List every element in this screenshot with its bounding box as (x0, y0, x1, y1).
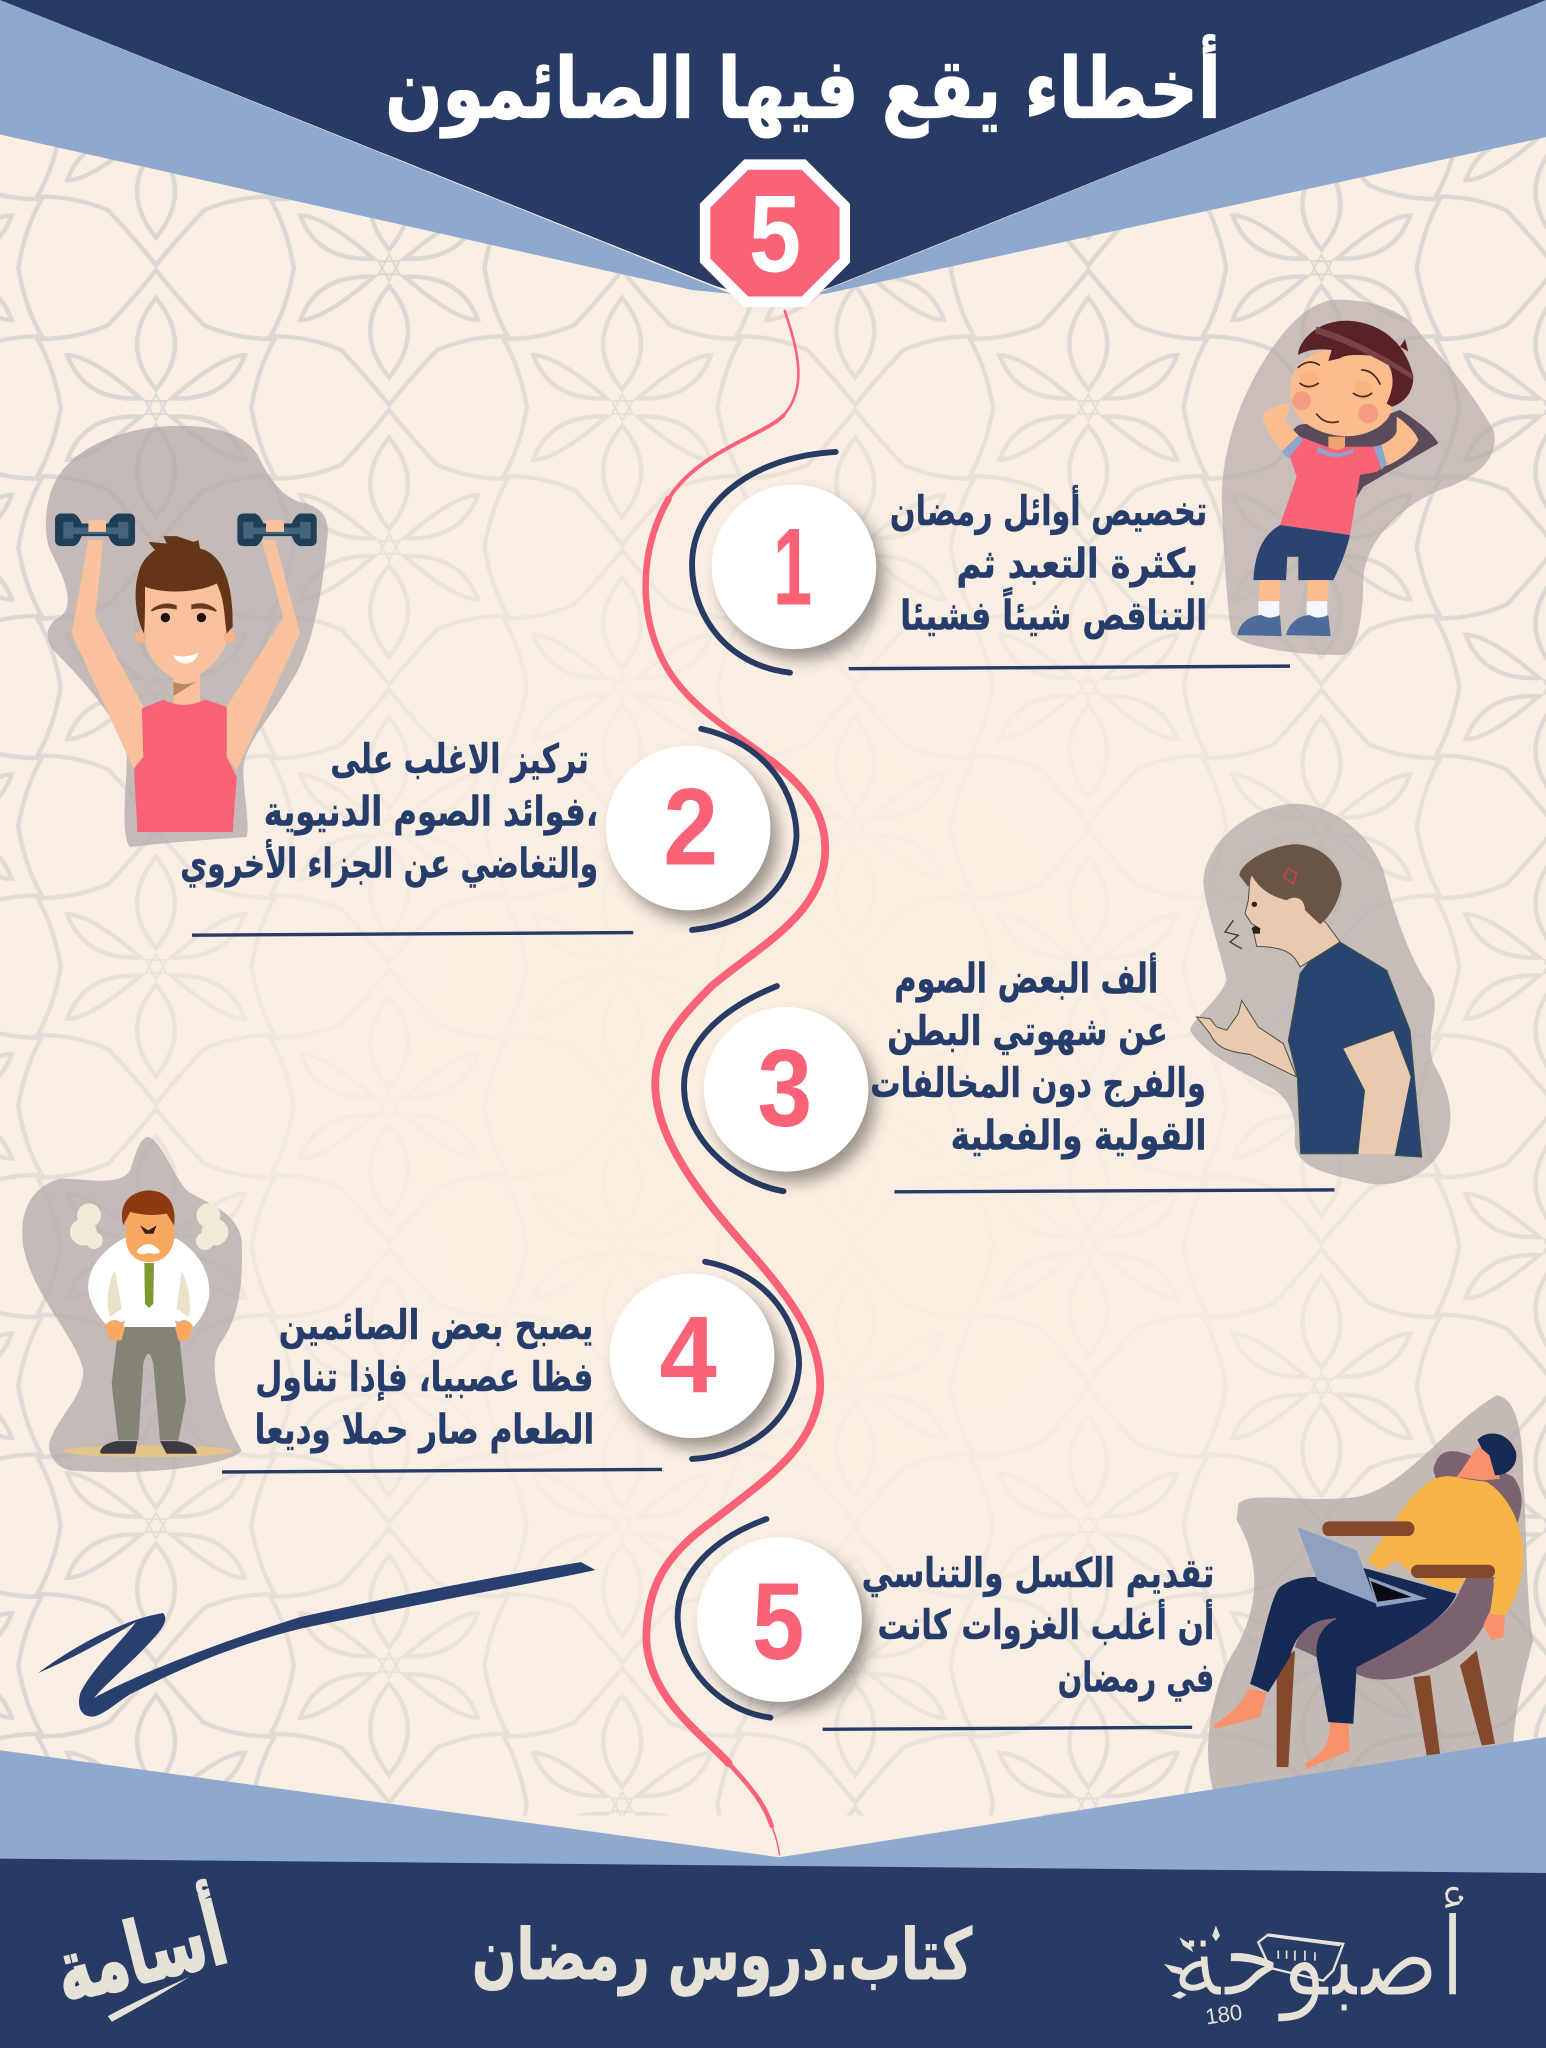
step 3: والفرج دون المخالفات (870, 1059, 1206, 1107)
step 4: الطعام صار حملا وديعا (255, 1405, 594, 1454)
step 2: والتغاضي عن الجزاء الأخروي (180, 839, 598, 888)
step 3: عن شهوتي البطن (887, 1007, 1168, 1055)
step 1: التناقص شيئاً فشيئا (900, 587, 1207, 640)
step 3: 3 (757, 1028, 812, 1150)
step 4: فظا عصبيا، فإذا تناول (255, 1353, 593, 1401)
step 1: 1 (773, 507, 812, 629)
illustration: man lifting dumbbells (46, 426, 328, 847)
title: أخطاء يقع فيها الصائمون (385, 35, 1221, 139)
octagon badge with number 5: 5 (749, 174, 801, 296)
step 3 (684, 953, 1334, 1192)
step 2: ،فوائد الصوم الدنيوية (264, 787, 598, 836)
step 1 (692, 452, 1290, 673)
illustration: angry man (22, 1137, 242, 1472)
step 5 (678, 1519, 1214, 1729)
top navy banner (0, 0, 1546, 303)
illustration: sleeping boy (1222, 300, 1495, 655)
top right light blue band (816, 0, 1546, 294)
logo: Osama (43, 1878, 239, 2032)
logo: Osama: أسامة (43, 1878, 236, 2023)
bottom left light blue band (0, 1750, 780, 1868)
step 5: في رمضان (1058, 1653, 1214, 1701)
top left light blue band (0, 0, 731, 294)
bottom navy footer (0, 1859, 1546, 2048)
step 3: ألف البعض الصوم (894, 953, 1158, 1004)
pink winding timeline (646, 311, 825, 1855)
step 4: 4 (659, 1294, 717, 1416)
step 4 (222, 1262, 799, 1472)
step 2 (180, 729, 797, 935)
logo: Osbouha 180: 180 (1204, 1999, 1244, 2029)
step 4: يصبح بعض الصائمين (279, 1301, 593, 1349)
step 3: القولية والفعلية (951, 1111, 1207, 1159)
octagon badge with number 5 (700, 159, 850, 307)
bottom right light blue band (780, 1737, 1546, 1876)
brush scribble (38, 1562, 595, 1717)
step 5: تقديم الكسل والتناسي (862, 1549, 1214, 1597)
step 2: 2 (663, 767, 718, 889)
step 1: تخصيص أوائل رمضان (890, 485, 1207, 535)
logo: Osbouha 180: أصبوحة (1172, 1886, 1466, 2023)
step 2: تركيز الاغلب على (330, 735, 589, 783)
illustration: man speaking badly (1190, 804, 1450, 1184)
step 5: أن أغلب الغزوات كانت (877, 1599, 1214, 1649)
step 5: 5 (752, 1561, 804, 1683)
step 1: بكثرة التعبد ثم (956, 539, 1198, 587)
footer book title: كتاب.دروس رمضان (472, 1914, 973, 1996)
illustration: lazy man in chair (1208, 1395, 1533, 1790)
